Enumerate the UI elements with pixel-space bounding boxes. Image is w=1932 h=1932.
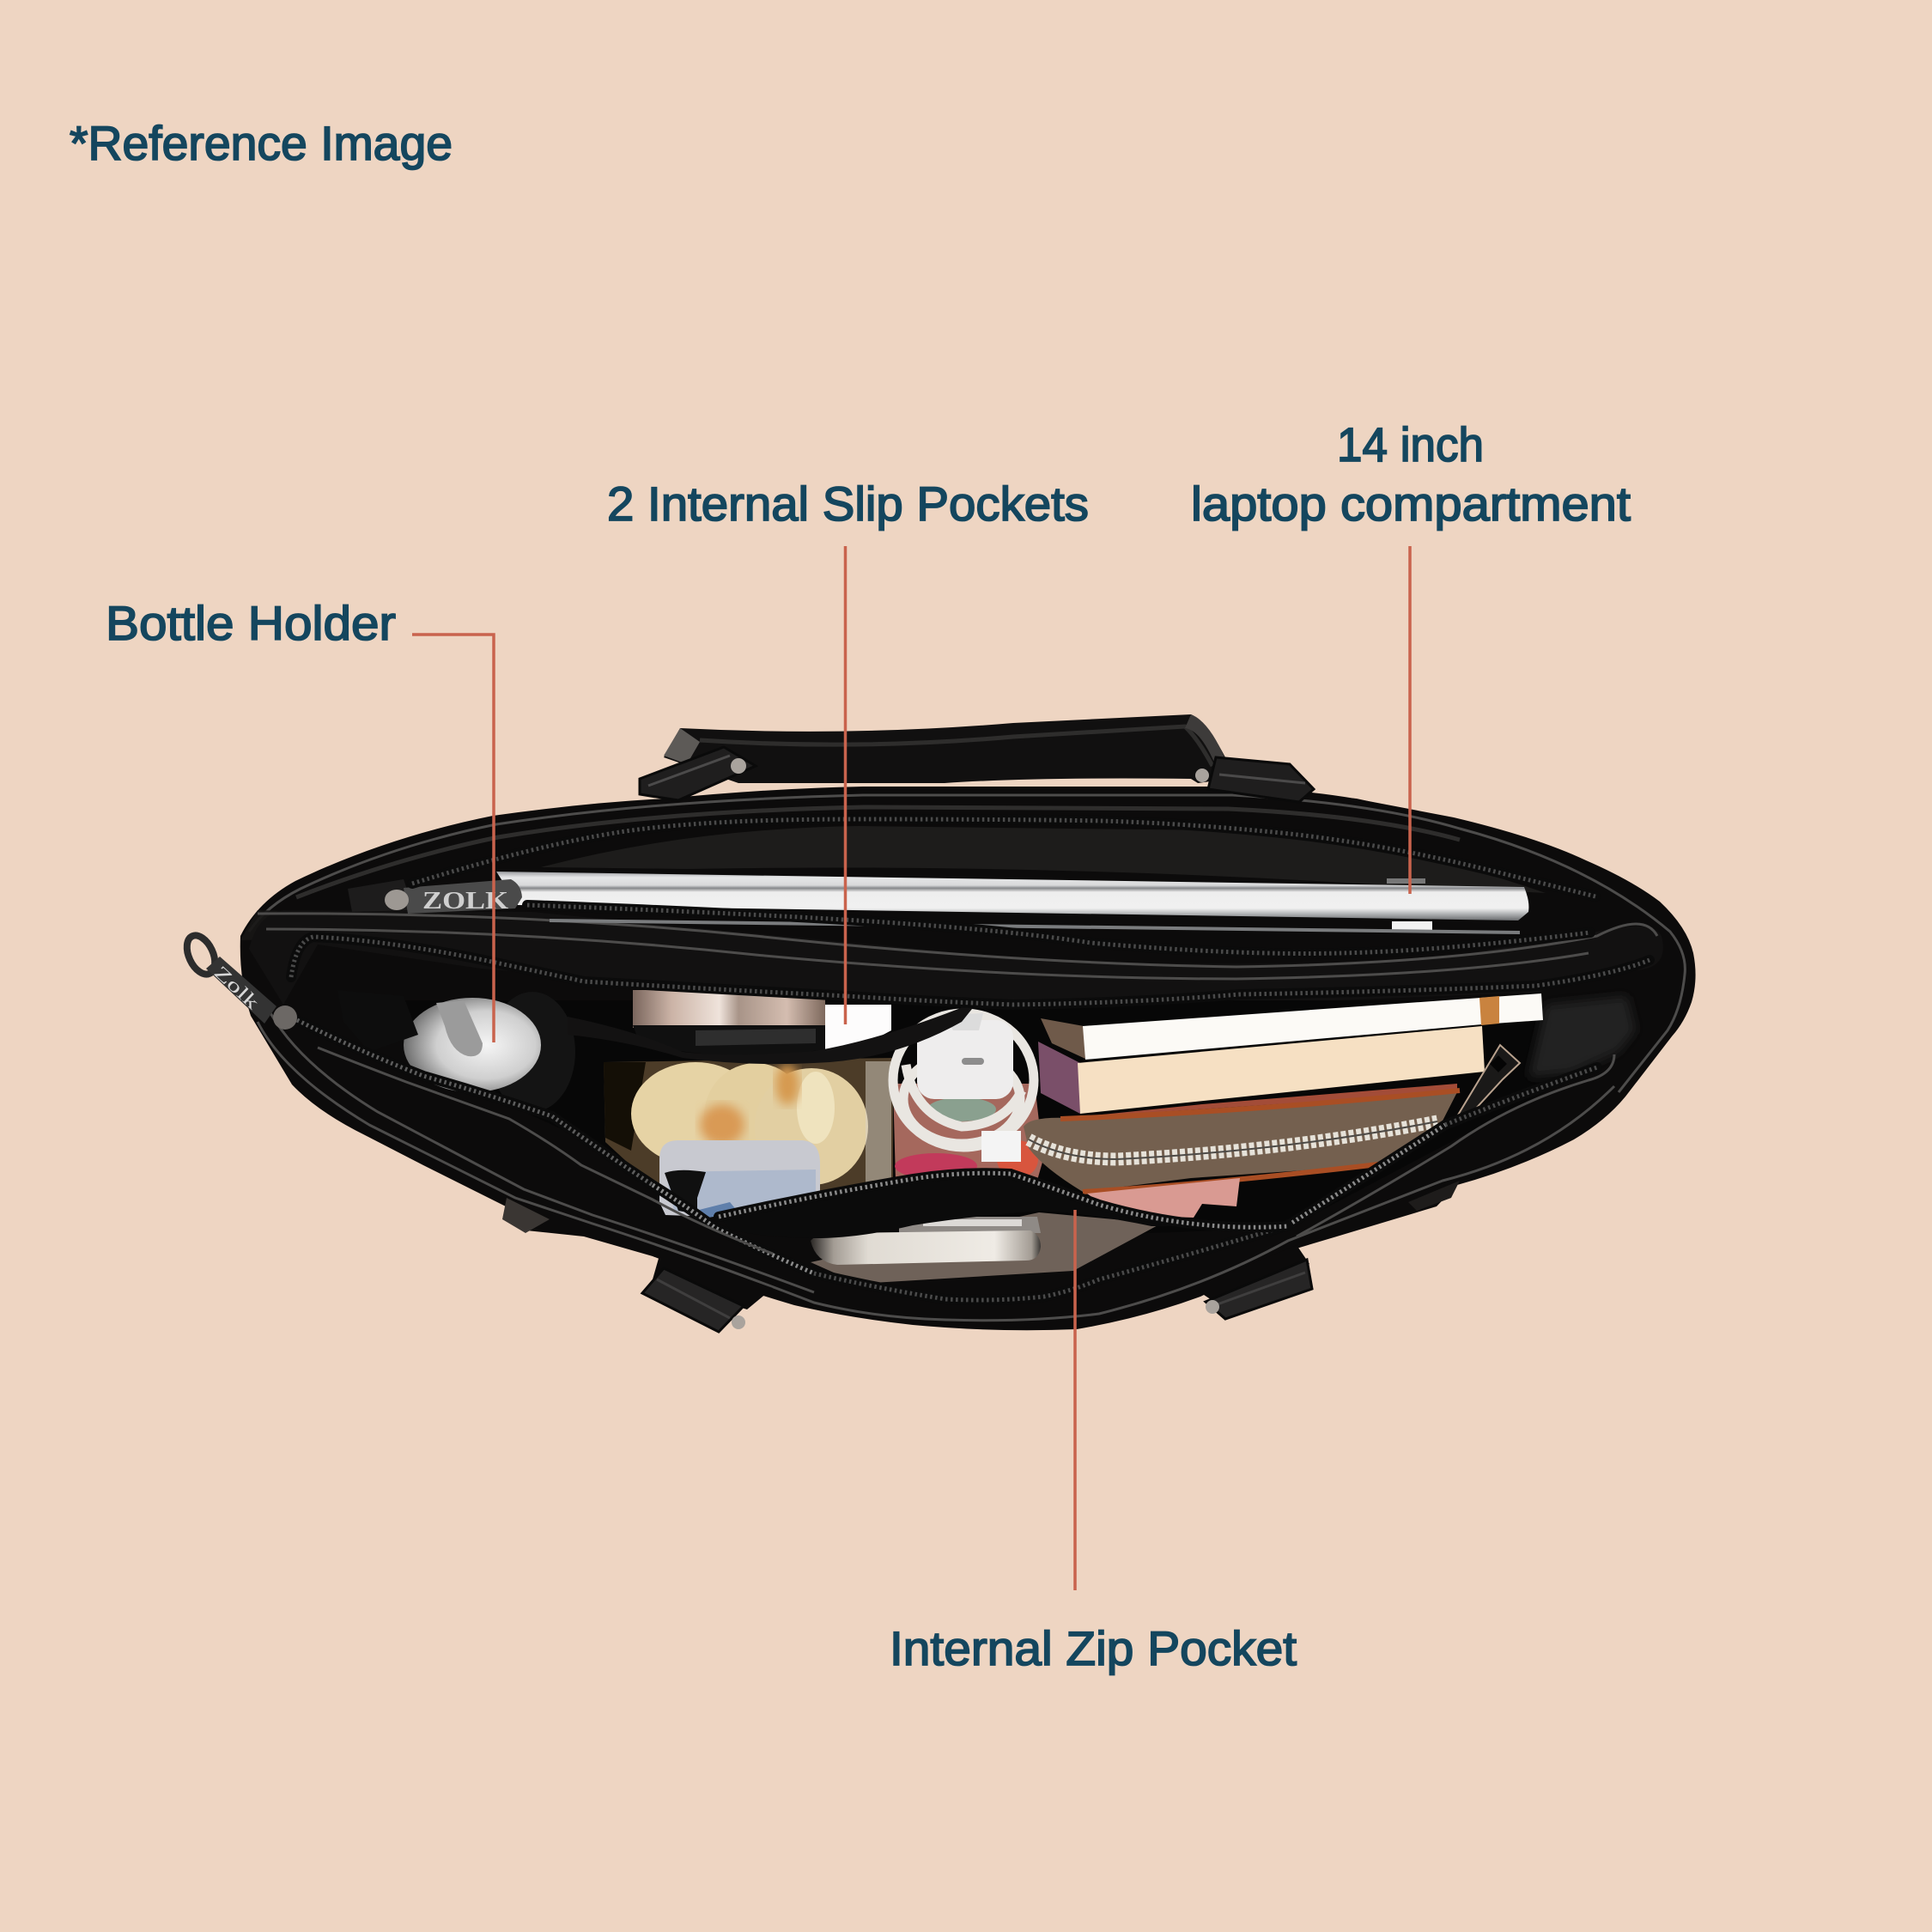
floral fabric bbox=[893, 1084, 1043, 1189]
books bbox=[1038, 993, 1543, 1114]
label: bottle holder: Bottle Holder bbox=[106, 596, 396, 650]
leader line: slip pockets bbox=[844, 546, 847, 1024]
white block bbox=[825, 1005, 891, 1049]
back panel brown edge bbox=[1219, 794, 1451, 820]
lower book bbox=[1038, 1026, 1485, 1114]
label: zip pocket: Internal Zip Pocket bbox=[890, 1621, 1297, 1675]
left side panel strap bbox=[240, 910, 1013, 989]
blue plastic box bbox=[659, 1140, 820, 1218]
leather tab with ring bbox=[1457, 1045, 1520, 1116]
front zip pocket panel bbox=[719, 1173, 1288, 1238]
bag photo bbox=[181, 714, 1696, 1332]
thermos bbox=[633, 990, 825, 1056]
zipper pull: top pocket: ZOLK bbox=[422, 888, 508, 914]
phone bbox=[811, 1217, 1041, 1265]
upper laptop pocket lining bbox=[541, 826, 1546, 893]
floral lining under pouch bbox=[1087, 1178, 1240, 1218]
label: laptop compartment bbox=[1191, 417, 1631, 531]
outer edge highlights bbox=[249, 795, 1685, 1321]
label: slip pockets: 2 Internal Slip Pockets bbox=[607, 477, 1089, 531]
note: reference image: *Reference Image bbox=[70, 116, 453, 170]
zipped pouch bbox=[1024, 1084, 1460, 1192]
handle tabs bbox=[502, 747, 1460, 1332]
bag body bbox=[240, 787, 1696, 1330]
flap seams bbox=[258, 914, 1657, 979]
zipper pull: top pocket bbox=[348, 879, 522, 914]
zipper pull: front pocket bbox=[181, 931, 297, 1030]
lining print bbox=[811, 1212, 1161, 1284]
leader line: zip pocket bbox=[1073, 1210, 1077, 1590]
bottle holder contents bbox=[337, 990, 575, 1112]
laptop bbox=[496, 872, 1528, 933]
leader line: bottle holder bbox=[412, 635, 494, 1042]
lower middle flap bbox=[249, 910, 1663, 1009]
charger and cable bbox=[893, 1013, 1034, 1162]
front flap seams bbox=[318, 1048, 1614, 1254]
label: laptop compartment: 14 inch bbox=[1337, 417, 1484, 471]
slip pocket flap bbox=[568, 1000, 979, 1064]
upper book bbox=[1041, 993, 1543, 1060]
glass jar of chips bbox=[604, 1058, 893, 1206]
leader line: laptop compartment bbox=[1408, 546, 1412, 894]
top handle bbox=[664, 714, 1241, 783]
zipper pull: front pocket: Zolk bbox=[210, 961, 264, 1013]
label: laptop compartment: laptop compartment bbox=[1191, 477, 1631, 531]
main interior bbox=[378, 1000, 1597, 1236]
zippers bbox=[291, 819, 1649, 1300]
right interior lining bbox=[1528, 996, 1636, 1078]
